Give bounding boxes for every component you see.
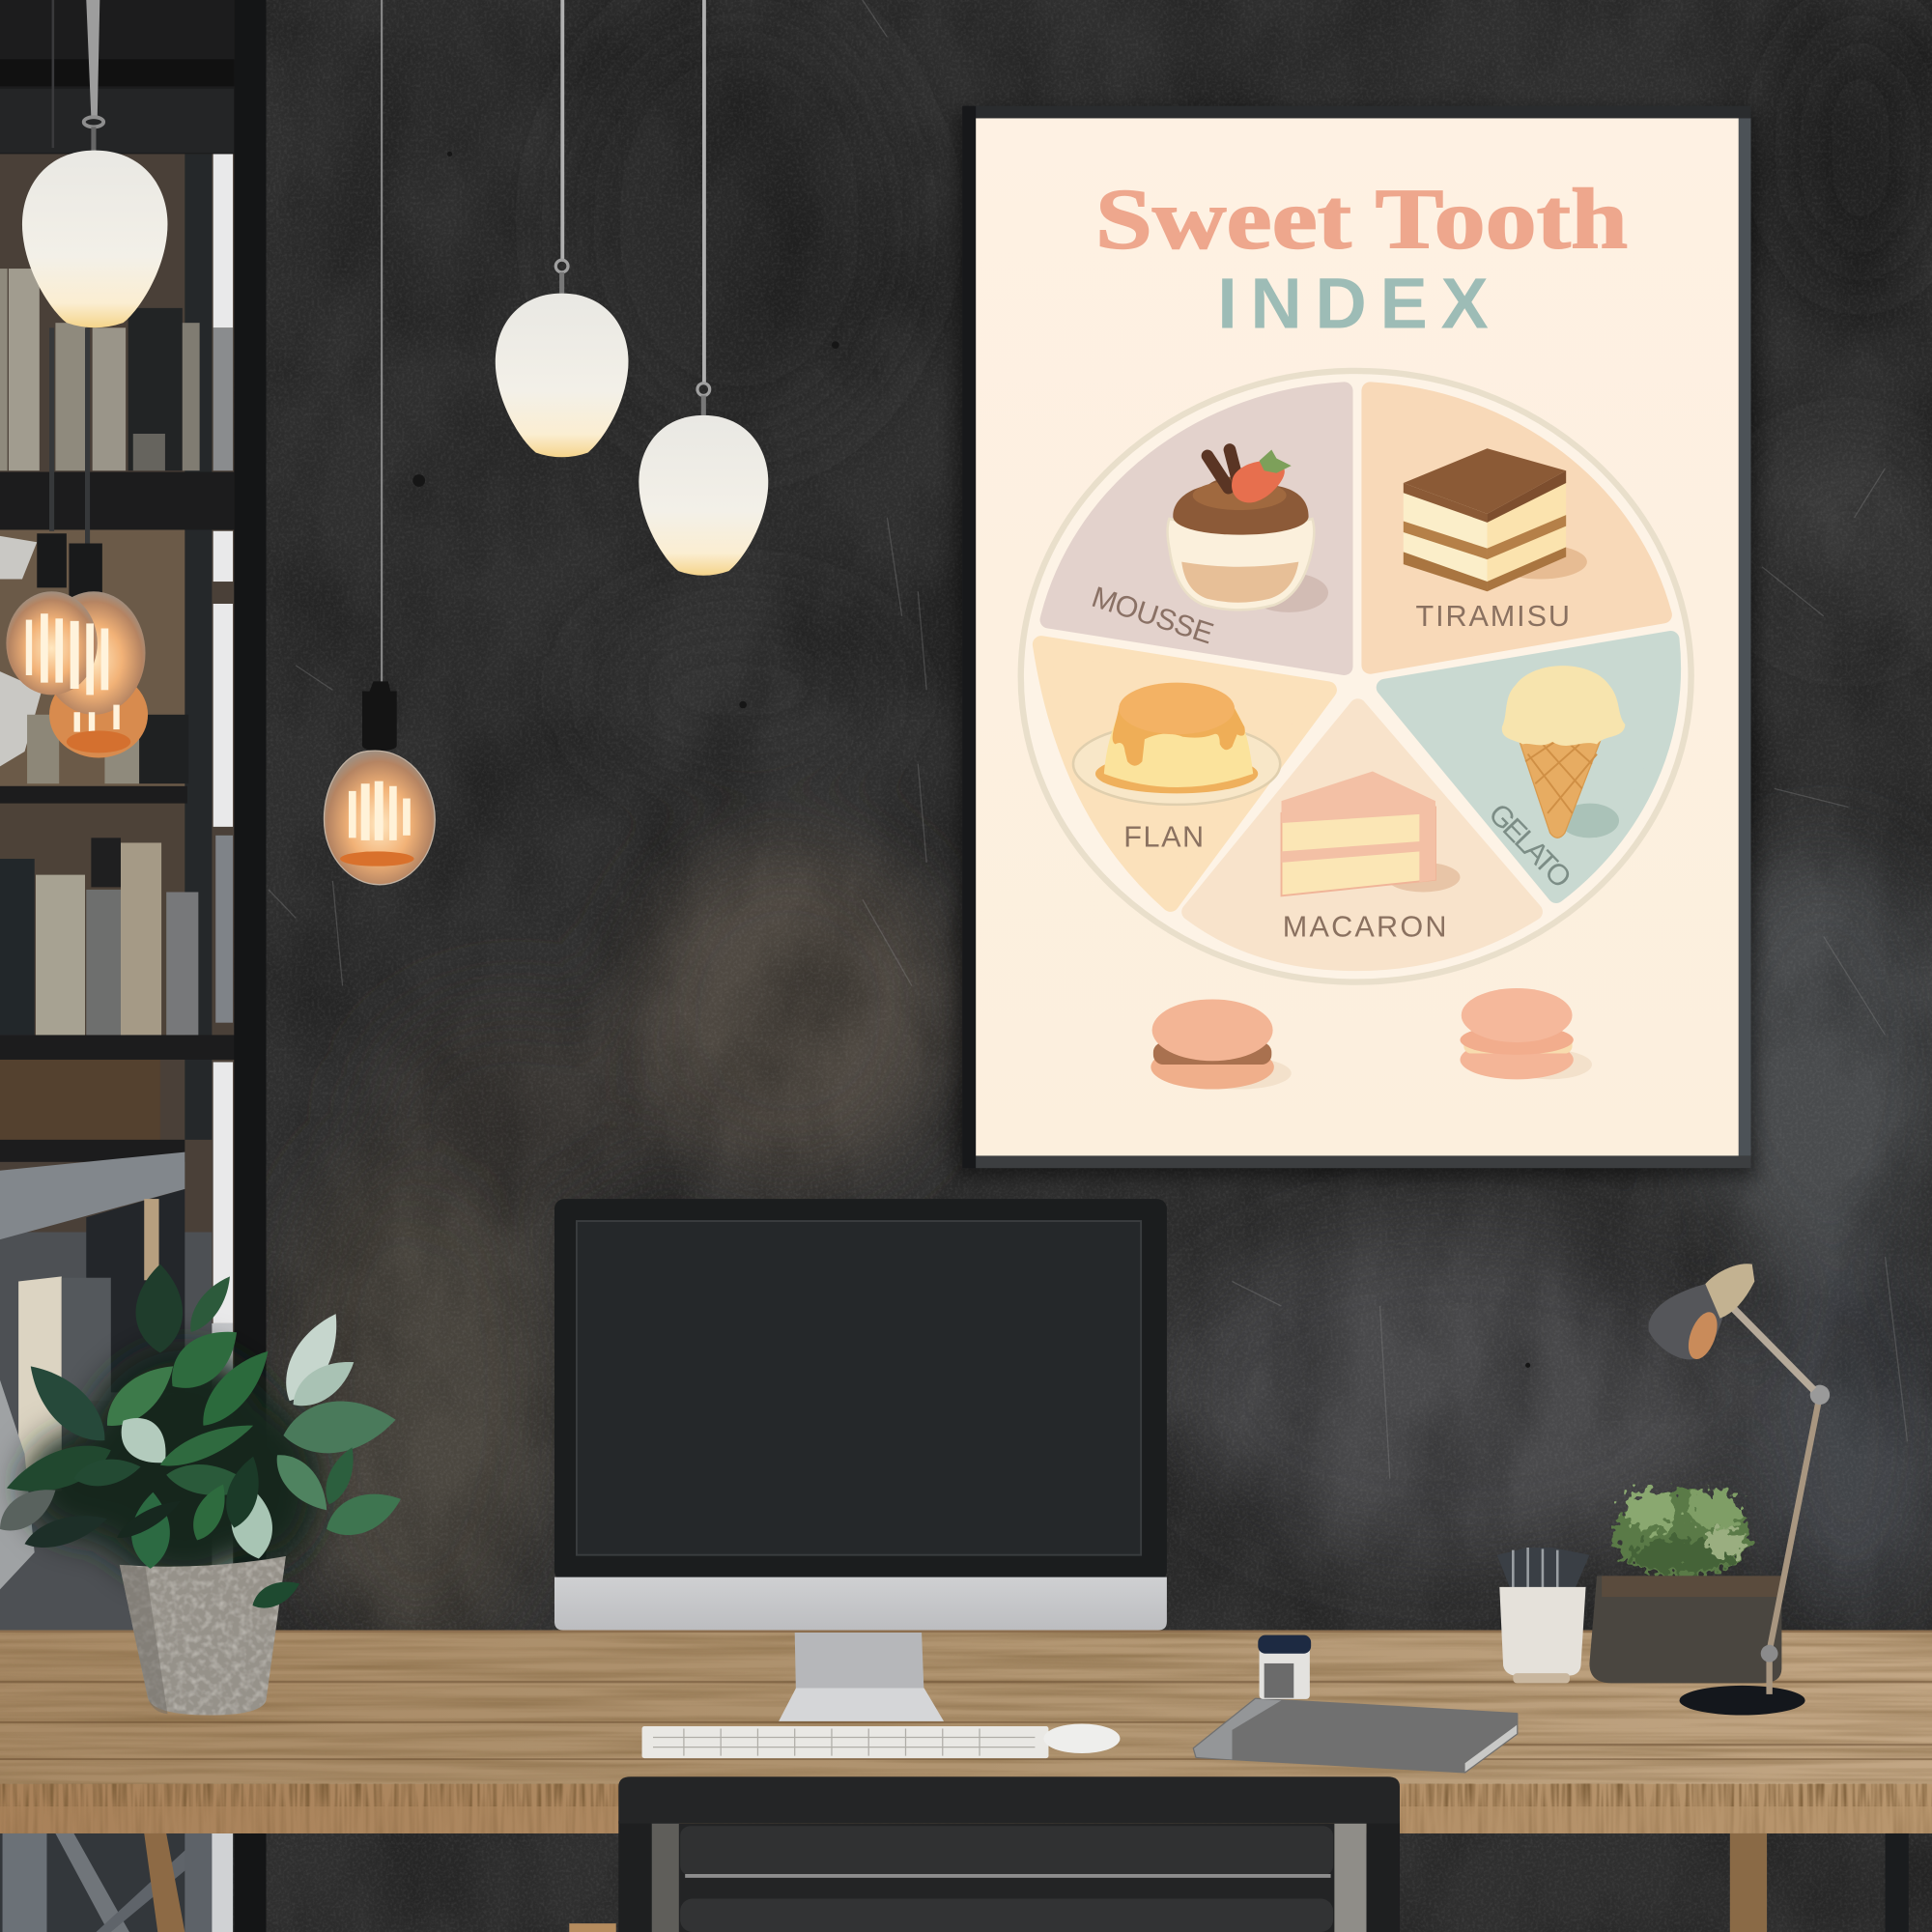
books row one xyxy=(0,269,200,470)
books row three xyxy=(0,838,198,1035)
segment: tiramisu xyxy=(1370,390,1663,666)
pencil cup xyxy=(1497,1548,1589,1683)
keyboard xyxy=(642,1726,1048,1758)
poster title: Sweet Tooth xyxy=(1095,171,1628,267)
macaron right xyxy=(1460,988,1592,1079)
notebook xyxy=(1194,1699,1517,1772)
hanging light: filament bulb xyxy=(324,0,435,885)
shelf boards xyxy=(0,0,237,1162)
monitor chin xyxy=(554,1577,1167,1631)
hanging light: white pendant centre xyxy=(496,0,628,457)
planter box xyxy=(1589,1576,1781,1683)
pie outer ring xyxy=(1021,371,1691,982)
small cup xyxy=(1258,1635,1311,1699)
label: mousse: MOUSSE xyxy=(1088,581,1217,650)
plant foliage mass xyxy=(25,1350,321,1583)
segment: mousse xyxy=(1048,390,1345,667)
left plant xyxy=(0,1264,408,1716)
poster frame xyxy=(956,106,1757,1178)
lower shelf section xyxy=(0,1152,212,1631)
hanging light: white pendant left xyxy=(22,0,167,543)
desk lamp xyxy=(1648,1264,1830,1716)
label: macaron: MACARON xyxy=(1283,910,1446,943)
shelf upright post xyxy=(234,0,267,1932)
hanging light: shelf filament bulbs xyxy=(6,533,148,757)
monitor screen xyxy=(577,1221,1141,1555)
wall scratches xyxy=(269,0,1907,1479)
gelato illustration xyxy=(1502,666,1625,838)
under-desk shelf base xyxy=(0,1833,233,1932)
office chair xyxy=(618,1776,1400,1932)
lamp arm xyxy=(1730,1305,1814,1390)
hanging light: white pendant right xyxy=(639,0,768,576)
mouse xyxy=(1043,1723,1120,1753)
plant leaves xyxy=(0,1264,408,1615)
lamp pole xyxy=(1770,1401,1819,1694)
flan illustration xyxy=(1073,683,1280,805)
segment: macaron xyxy=(1190,707,1534,962)
macaron left xyxy=(1151,999,1292,1090)
plant pot xyxy=(120,1556,286,1716)
poster paper xyxy=(976,118,1739,1155)
monitor stand xyxy=(779,1633,944,1721)
mousse illustration xyxy=(1168,450,1328,612)
white shelf ornament xyxy=(0,536,42,766)
tiramisu illustration xyxy=(1404,448,1587,591)
desk plank streaks xyxy=(0,1681,1932,1760)
bookshelf xyxy=(0,0,267,1932)
poster subtitle: INDEX xyxy=(1217,263,1489,343)
herb foliage xyxy=(1615,1490,1748,1578)
lamp head xyxy=(1648,1284,1722,1359)
white window strips xyxy=(213,154,233,1323)
cake illustration xyxy=(1282,771,1460,895)
label: flan: FLAN xyxy=(1123,820,1204,853)
books row two xyxy=(27,715,188,783)
lamp base xyxy=(1680,1686,1805,1716)
desk xyxy=(0,1631,1932,1932)
segment: gelato xyxy=(1385,639,1672,895)
segment: flan xyxy=(1041,644,1328,903)
pie chart xyxy=(1021,371,1691,982)
potted herb planter xyxy=(1589,1490,1781,1683)
monitor xyxy=(554,1199,1167,1631)
label: gelato: GELATO xyxy=(1482,797,1577,895)
label: tiramisu: TIRAMISU xyxy=(1416,600,1570,633)
